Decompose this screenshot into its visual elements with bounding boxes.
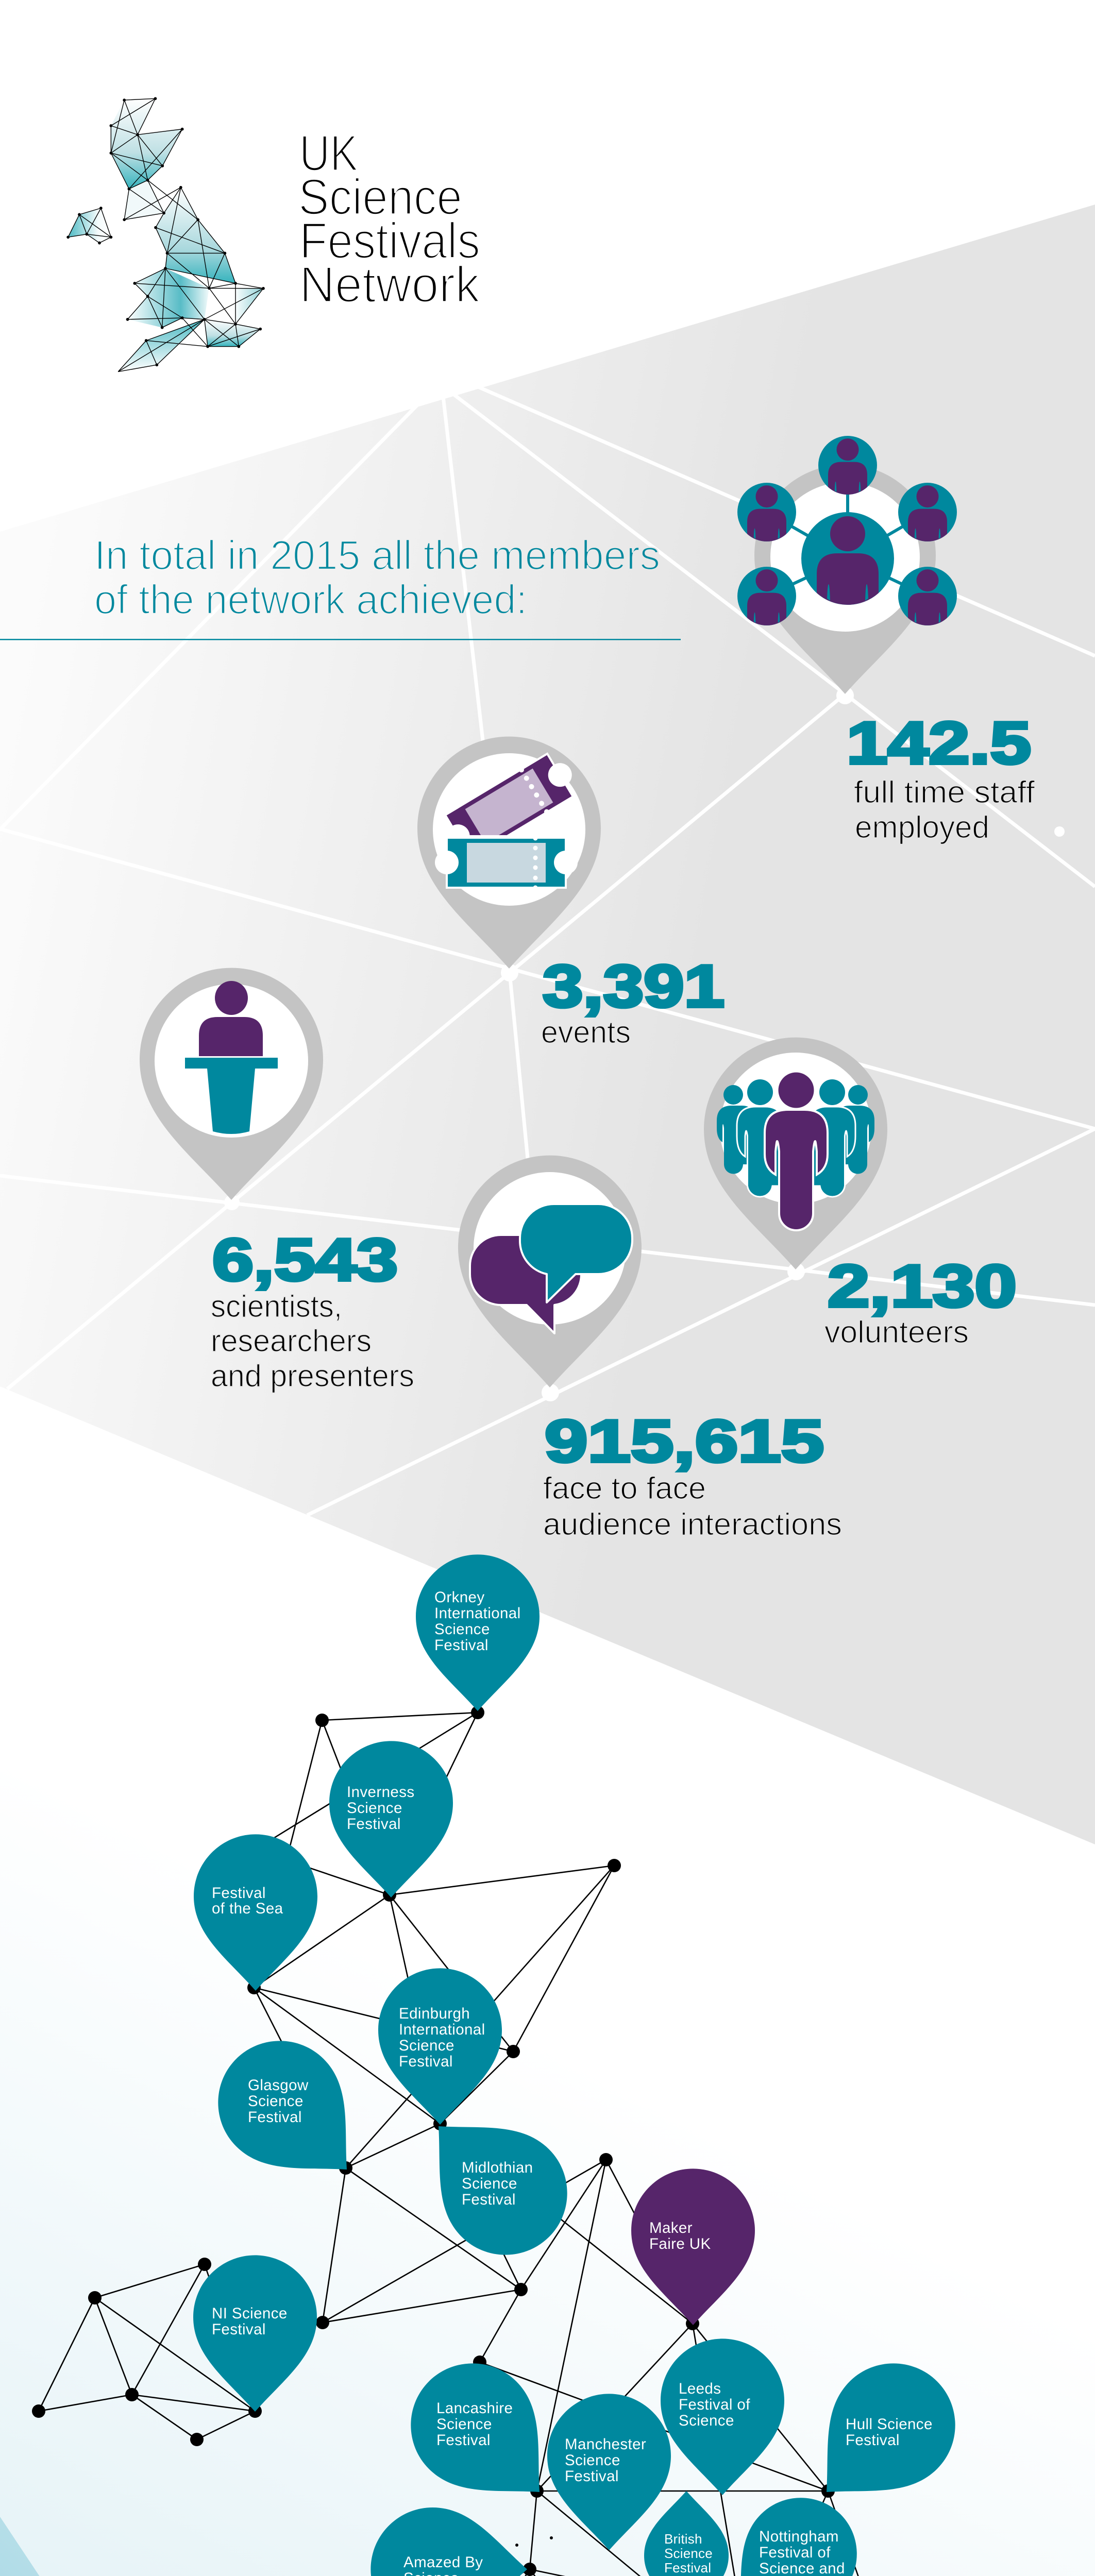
- label: scientists, researchers and presenters: researchers: [211, 1324, 372, 1358]
- panel: grey statistics band: [0, 205, 1095, 1844]
- pin: Manchester Science Festival: [547, 2394, 671, 2550]
- pin: Midlothian Science Festival: Science: [462, 2175, 517, 2192]
- pin: NI Science Festival: Festival: [212, 2321, 266, 2338]
- pin: Orkney International Science Festival: Orkney: [434, 1589, 484, 1606]
- label: full time staff employed: [854, 775, 1035, 844]
- pin: Hull Science Festival: Festival: [846, 2432, 900, 2449]
- number: 6,543: 6,543: [212, 1226, 398, 1293]
- pin icon: speech bubbles: [458, 1156, 642, 1387]
- heading: in total in 2015: of the network achieved:: [94, 577, 527, 622]
- number: 2,130: 2,130: [828, 1252, 1017, 1319]
- pin: Glasgow Science Festival: Glasgow: [248, 2077, 309, 2094]
- background: pale blue gradient lower panel: [0, 1386, 1095, 2576]
- pin: Midlothian Science Festival: [395, 2082, 593, 2281]
- label: scientists, researchers and presenters: and presenters: [211, 1359, 414, 1393]
- pin: Nottingham Festival of Science and Curiosity: Festival of: [759, 2544, 831, 2561]
- pin: Lancashire Science Festival: Festival: [436, 2432, 491, 2449]
- pin: Inverness Science Festival: Inverness: [347, 1784, 414, 1801]
- pin: Manchester Science Festival: Manchester: [565, 2436, 646, 2453]
- pin: Glasgow Science Festival: Science: [248, 2093, 304, 2110]
- pin: Maker Faire UK: Faire UK: [649, 2235, 711, 2252]
- pin: Midlothian Science Festival: Festival: [462, 2191, 516, 2208]
- stat: scientists, researchers and presenters: [140, 968, 414, 1393]
- pin: Midlothian Science Festival: Midlothian: [462, 2159, 533, 2176]
- pin: Festival of the Sea: of the Sea: [212, 1900, 283, 1917]
- label: events: events: [541, 1015, 631, 1049]
- pin: British Science Festival: Science: [664, 2546, 713, 2561]
- pin: Inverness Science Festival: [329, 1741, 453, 1897]
- pin: NI Science Festival: NI Science: [212, 2305, 288, 2322]
- pin icon: staff network: [737, 436, 957, 694]
- pin: Festival of the Sea: [194, 1834, 317, 1991]
- pin: Edinburgh International Science Festival: Festival: [399, 2053, 453, 2070]
- pin: Edinburgh International Science Festival: [378, 1968, 502, 2125]
- number: 915,615: 915,615: [545, 1408, 824, 1475]
- title: UK Science Festivals Network: UK: [299, 125, 358, 181]
- stat: face to face audience interactions: [458, 1156, 842, 1541]
- pin icon: group of volunteers: [704, 1038, 887, 1269]
- label: face to face audience interactions: [543, 1471, 842, 1541]
- pin: Hull Science Festival: [783, 2337, 981, 2536]
- pin: Festival of the Sea: Festival: [212, 1885, 266, 1902]
- label: scientists, researchers and presenters: scientists,: [211, 1289, 342, 1324]
- title: UK Science Festivals Network: [298, 125, 480, 313]
- pin: Edinburgh International Science Festival: International: [399, 2021, 485, 2038]
- pin: Edinburgh International Science Festival: Science: [399, 2037, 454, 2054]
- pin: British Science Festival: [644, 2491, 729, 2576]
- pin: British Science Festival: Festival: [664, 2560, 711, 2575]
- logo: UK network map: [66, 97, 265, 371]
- pin: Orkney International Science Festival: International: [434, 1605, 521, 1622]
- pin: Orkney International Science Festival: Festival: [434, 1637, 488, 1654]
- pin: Leeds Festival of Science: [661, 2338, 784, 2495]
- pin: Leeds Festival of Science: Leeds: [679, 2380, 721, 2397]
- pin: Edinburgh International Science Festival: Edinburgh: [399, 2005, 470, 2022]
- pin: Amazed By Science: Amazed By: [403, 2554, 483, 2571]
- pin: Nottingham Festival of Science and Curiosity: Nottingham: [759, 2528, 839, 2545]
- stat: events: [417, 737, 725, 1049]
- pin: Lancashire Science Festival: [385, 2337, 583, 2536]
- title: UK Science Festivals Network: Festivals: [299, 212, 480, 269]
- label: face to face audience interactions: audience interactions: [543, 1507, 842, 1541]
- pin: Leeds Festival of Science: Science: [679, 2412, 734, 2429]
- stat: full time staff: [737, 436, 1035, 844]
- pin: Orkney International Science Festival: Science: [434, 1621, 490, 1638]
- pin: Nottingham Festival of Science and Curiosity: [700, 2475, 880, 2576]
- pin: Lancashire Science Festival: Lancashire: [436, 2400, 513, 2417]
- pin: Lancashire Science Festival: Science: [436, 2416, 492, 2433]
- pin icon: presenter at lectern: [140, 968, 323, 1200]
- title: UK Science Festivals Network: Network: [299, 256, 480, 313]
- label: full time staff employed: employed: [855, 810, 989, 844]
- number: 142.5: 142.5: [847, 709, 1031, 776]
- label: face to face audience interactions: face to face: [543, 1471, 706, 1505]
- white network lines in grey band: [0, 387, 1095, 1515]
- label: volunteers: volunteers: [824, 1315, 969, 1349]
- pin icon: tickets: [417, 737, 601, 969]
- network map: connecting lines: [39, 1713, 1023, 2576]
- label: scientists, researchers and presenters: [211, 1289, 414, 1393]
- pin: Amazed By Science: [370, 2507, 527, 2576]
- pin: Maker Faire UK: Maker: [649, 2219, 693, 2236]
- pin: Glasgow Science Festival: Festival: [248, 2109, 302, 2126]
- heading: in total in 2015: In total in 2015 all the members: [94, 532, 660, 578]
- pin: Inverness Science Festival: Festival: [347, 1816, 401, 1833]
- pin: Glasgow Science Festival: [192, 2015, 391, 2213]
- pin: Manchester Science Festival: Science: [565, 2452, 620, 2469]
- pin: Inverness Science Festival: Science: [347, 1800, 402, 1817]
- pin: British Science Festival: British: [664, 2531, 702, 2547]
- pin: NI Science Festival: [193, 2255, 317, 2412]
- background: blue triangle bottom-left: [0, 2517, 415, 2576]
- pin: Orkney International Science Festival: [416, 1554, 540, 1711]
- pin: Leeds Festival of Science: Festival of: [679, 2396, 750, 2413]
- stat: volunteers: [704, 1038, 1017, 1349]
- title: UK Science Festivals Network: Science: [298, 168, 462, 225]
- pin: Manchester Science Festival: Festival: [565, 2468, 619, 2485]
- pin: Maker Faire UK: [631, 2168, 755, 2325]
- number: 3,391: 3,391: [543, 953, 725, 1020]
- pin: Hull Science Festival: Hull Science: [846, 2416, 933, 2433]
- heading: in total in 2015: [0, 532, 681, 640]
- label: full time staff employed: full time staff: [854, 775, 1035, 809]
- network map: node dots: [32, 1706, 1030, 2576]
